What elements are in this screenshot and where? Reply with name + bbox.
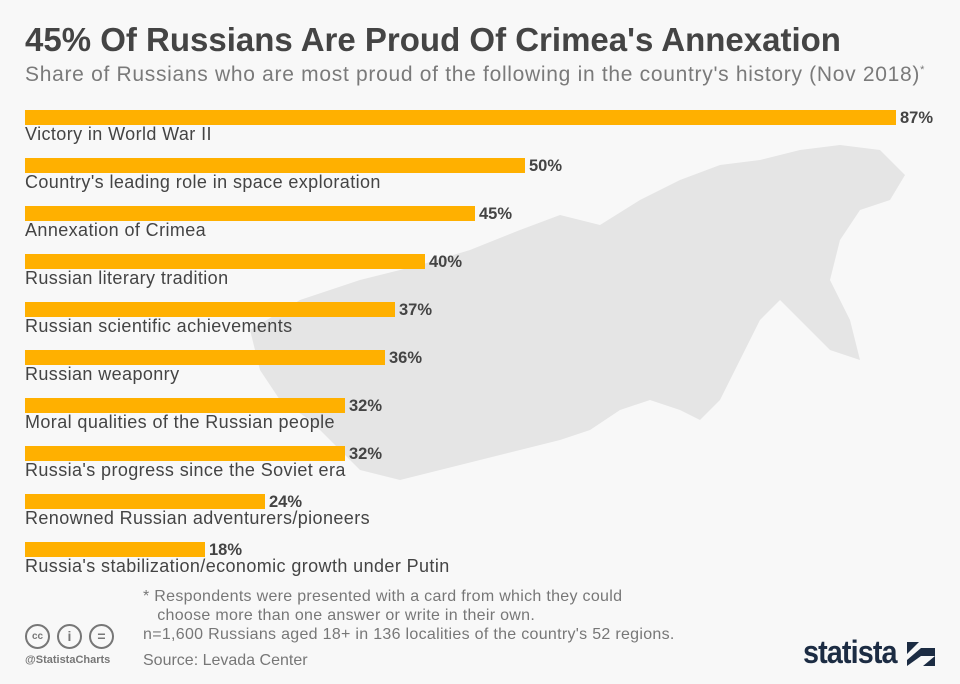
bar chart: 45% xyxy=(479,205,512,223)
bar chart: 50% xyxy=(529,157,562,175)
icon: license: = xyxy=(97,628,106,644)
bar chart xyxy=(25,109,933,576)
logo: statista xyxy=(803,634,897,670)
icon: license: i xyxy=(68,628,71,644)
bar chart: 37% xyxy=(399,301,432,319)
bar chart: Russian literary tradition xyxy=(25,268,228,288)
footnote: * Respondents were presented with a card from which they could xyxy=(143,588,622,605)
bar chart: Russia's progress since the Soviet era xyxy=(25,460,346,480)
footnote xyxy=(143,588,675,643)
bar chart: 36% xyxy=(389,349,422,367)
bar chart: 18% xyxy=(209,541,242,559)
source: Source: Levada Center xyxy=(143,652,308,669)
bar chart: Russian scientific achievements xyxy=(25,316,293,336)
bar chart: Renowned Russian adventurers/pioneers xyxy=(25,508,370,528)
bar chart: 32% xyxy=(349,397,382,415)
bar chart: 40% xyxy=(429,253,462,271)
bar chart: Moral qualities of the Russian people xyxy=(25,412,335,432)
title: 45% Of Russians Are Proud Of Crimea's Annexation xyxy=(25,21,841,58)
icon: license: cc xyxy=(32,631,43,642)
icon: license xyxy=(25,624,114,649)
footnote: n=1,600 Russians aged 18+ in 136 localities of the country's 52 regions. xyxy=(143,626,675,643)
bar chart: 32% xyxy=(349,445,382,463)
footnote: choose more than one answer or write in their own. xyxy=(157,607,535,624)
bar chart: 87% xyxy=(900,109,933,127)
bar chart: Russian weaponry xyxy=(25,364,179,384)
subtitle: Share of Russians who are most proud of the following in the country's history (Nov 2018)* xyxy=(25,63,925,86)
bar chart: Country's leading role in space exploration xyxy=(25,172,381,192)
bar chart: 24% xyxy=(269,493,302,511)
bar chart: Russia's stabilization/economic growth under Putin xyxy=(25,556,450,576)
bar chart: Annexation of Crimea xyxy=(25,220,206,240)
handle: @StatistaCharts xyxy=(25,654,110,666)
bar chart: Victory in World War II xyxy=(25,124,212,144)
